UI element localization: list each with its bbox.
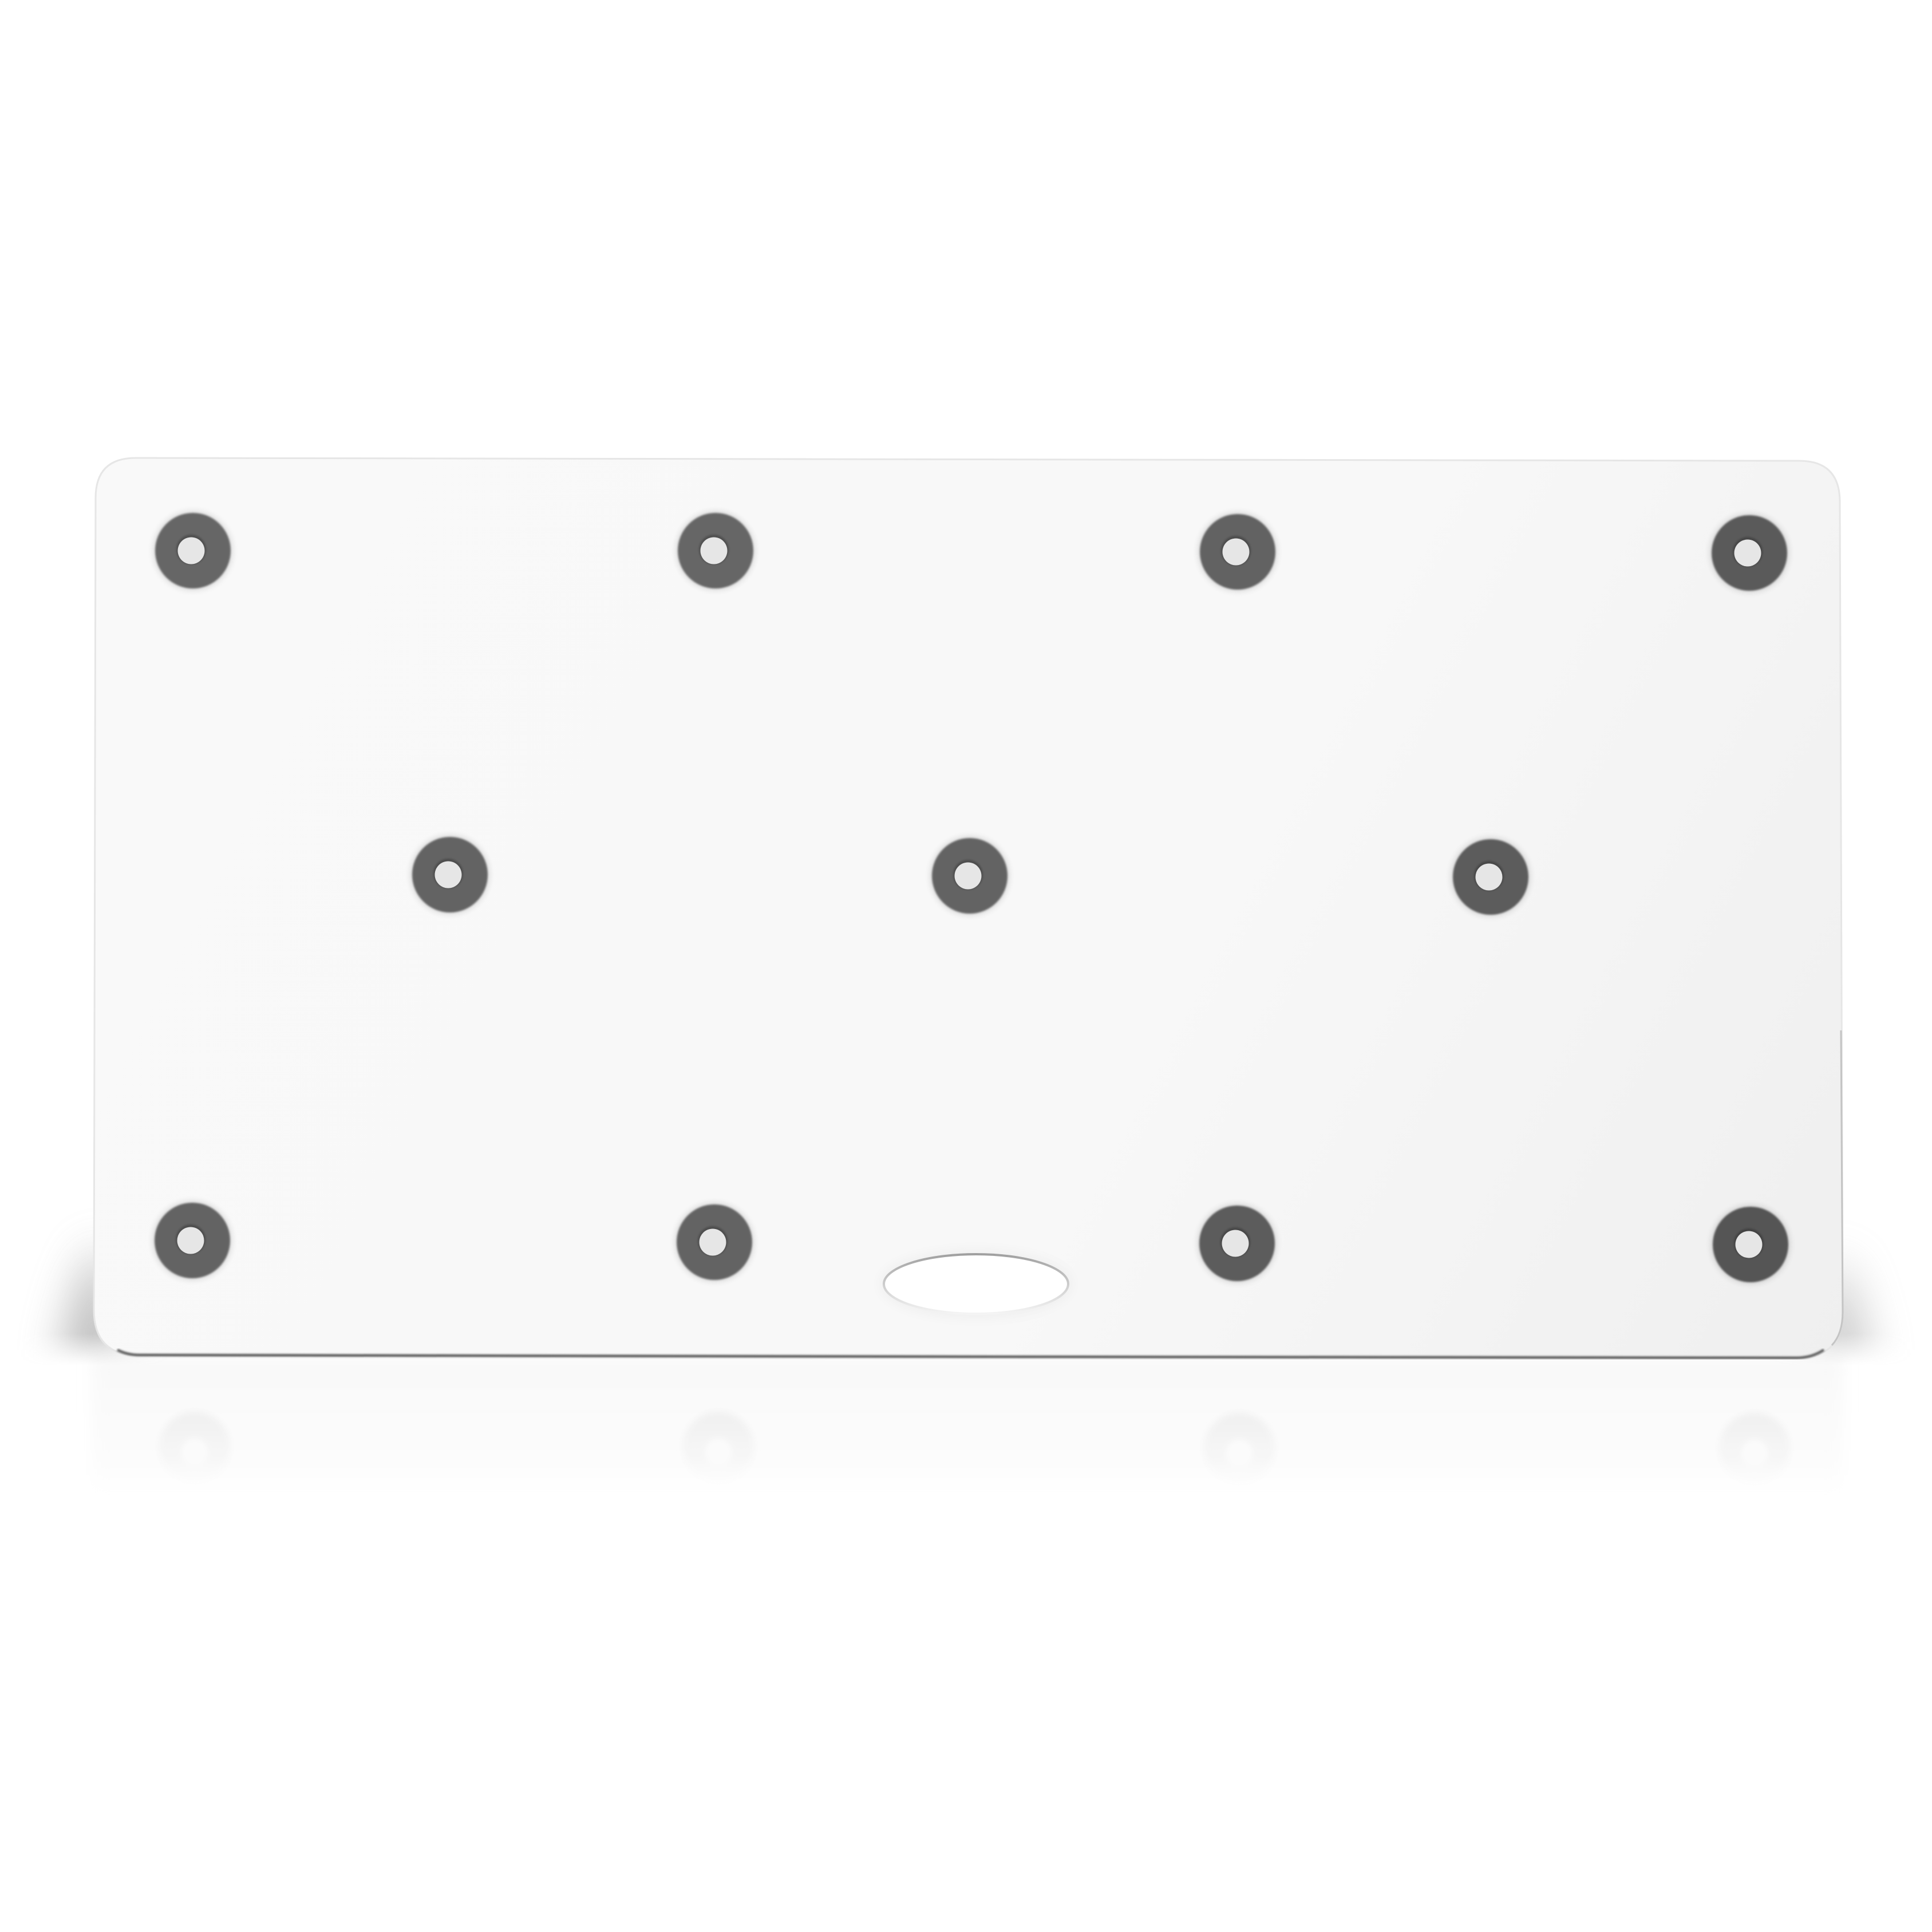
plate bottom edge (117, 1350, 1824, 1358)
cast shadow: right (1818, 1258, 1886, 1358)
middle row of washers (410, 835, 1531, 917)
washer 2 (675, 511, 756, 591)
washer 11 (1710, 1204, 1791, 1285)
washer 9 (674, 1202, 754, 1282)
top row of washers (153, 511, 1789, 593)
floor reflection (92, 1358, 1843, 1501)
washer 8 (152, 1200, 232, 1281)
oval cable cutout (881, 1251, 1071, 1317)
washer 4 (1709, 513, 1789, 593)
washer 10 (1197, 1203, 1277, 1283)
plate body (94, 458, 1843, 1358)
reflected washers (159, 1412, 1790, 1484)
washer 3 (1198, 512, 1278, 592)
washer 6 (930, 836, 1010, 916)
bottom row of washers (152, 1200, 1791, 1285)
product photo: white mounting plate (42, 457, 1886, 1459)
cast shadow: left (60, 1242, 132, 1374)
washer 5 (410, 835, 490, 915)
plate right edge (1832, 1030, 1843, 1345)
washer 7 (1451, 837, 1531, 917)
washer 1 (153, 511, 233, 591)
